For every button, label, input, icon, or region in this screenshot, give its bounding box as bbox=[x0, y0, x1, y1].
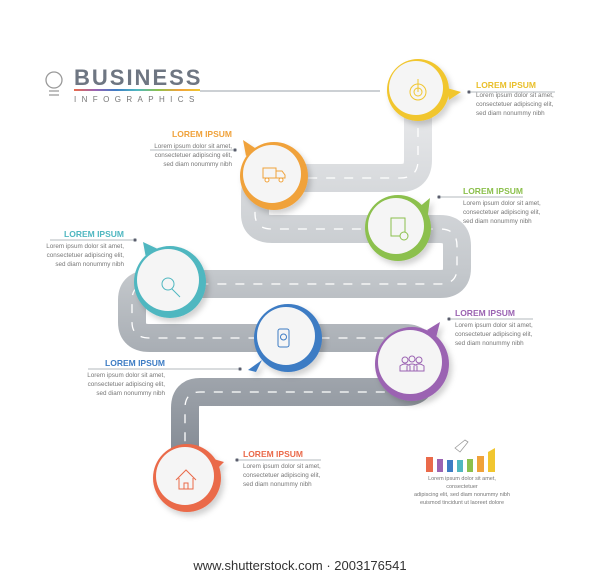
text: teal: sed diam nonummy nibh bbox=[55, 261, 124, 268]
text: teal: Lorem ipsum dolor sit amet, bbox=[46, 243, 124, 250]
text: orange: LOREM IPSUM bbox=[172, 129, 232, 139]
text: orange: Lorem ipsum dolor sit amet, bbox=[154, 143, 232, 150]
text: chart caption: euismod tincidunt ut laoreet dolore bbox=[420, 500, 504, 506]
step: red bbox=[153, 444, 224, 512]
text: blue: sed diam nonummy nibh bbox=[96, 390, 165, 397]
text: orange: consectetuer adipiscing elit, bbox=[155, 152, 232, 159]
text: yellow bbox=[476, 80, 554, 117]
header line bbox=[200, 90, 380, 92]
step: purple bbox=[375, 322, 449, 401]
step: blue bbox=[248, 304, 322, 372]
text: orange: sed diam nonummy nibh bbox=[163, 161, 232, 168]
text: purple bbox=[455, 308, 533, 347]
text: yellow: Lorem ipsum dolor sit amet, bbox=[476, 92, 554, 99]
connectors bbox=[50, 90, 555, 462]
text: red: consectetuer adipiscing elit, bbox=[243, 472, 320, 479]
title: BUSINESS bbox=[74, 65, 202, 90]
step: green bbox=[365, 195, 431, 261]
title bbox=[45, 65, 202, 104]
text: red: Lorem ipsum dolor sit amet, bbox=[243, 463, 321, 470]
text: chart caption bbox=[414, 476, 510, 506]
title: INFOGRAPHICS bbox=[74, 95, 200, 104]
footer watermark: www.shutterstock.com · 2003176541 bbox=[193, 558, 407, 573]
text: green: consectetuer adipiscing elit, bbox=[463, 209, 540, 216]
text: yellow: LOREM IPSUM bbox=[476, 80, 536, 90]
text: red: LOREM IPSUM bbox=[243, 449, 303, 459]
text: yellow: sed diam nonummy nibh bbox=[476, 110, 545, 117]
text: purple: consectetuer adipiscing elit, bbox=[455, 331, 532, 338]
text: red bbox=[243, 449, 321, 488]
step: yellow bbox=[387, 59, 461, 121]
text: purple: LOREM IPSUM bbox=[455, 308, 515, 318]
text: purple: Lorem ipsum dolor sit amet, bbox=[455, 322, 533, 329]
text: teal bbox=[46, 229, 124, 268]
bar chart icon bbox=[426, 440, 495, 472]
text: teal: consectetuer adipiscing elit, bbox=[47, 252, 124, 259]
text: green bbox=[463, 186, 541, 225]
text: teal: LOREM IPSUM bbox=[64, 229, 124, 239]
text: green: LOREM IPSUM bbox=[463, 186, 523, 196]
text: blue: LOREM IPSUM bbox=[105, 358, 165, 368]
text: blue: consectetuer adipiscing elit, bbox=[88, 381, 165, 388]
text: green: sed diam nonummy nibh bbox=[463, 218, 532, 225]
text: chart caption: adipiscing elit, sed diam nonummy nibh bbox=[414, 492, 510, 498]
text: red: sed diam nonummy nibh bbox=[243, 481, 312, 488]
road bbox=[132, 110, 457, 470]
text: green: Lorem ipsum dolor sit amet, bbox=[463, 200, 541, 207]
text: blue bbox=[87, 358, 165, 397]
step: teal bbox=[134, 242, 206, 318]
step: orange bbox=[240, 140, 308, 210]
text: chart caption: Lorem ipsum dolor sit amet, consectetuer bbox=[428, 476, 496, 490]
text: purple: sed diam nonummy nibh bbox=[455, 340, 524, 347]
text: blue: Lorem ipsum dolor sit amet, bbox=[87, 372, 165, 379]
text: yellow: consectetuer adipiscing elit, bbox=[476, 101, 553, 108]
icon: bulb bbox=[45, 71, 63, 96]
text: orange bbox=[154, 129, 232, 168]
